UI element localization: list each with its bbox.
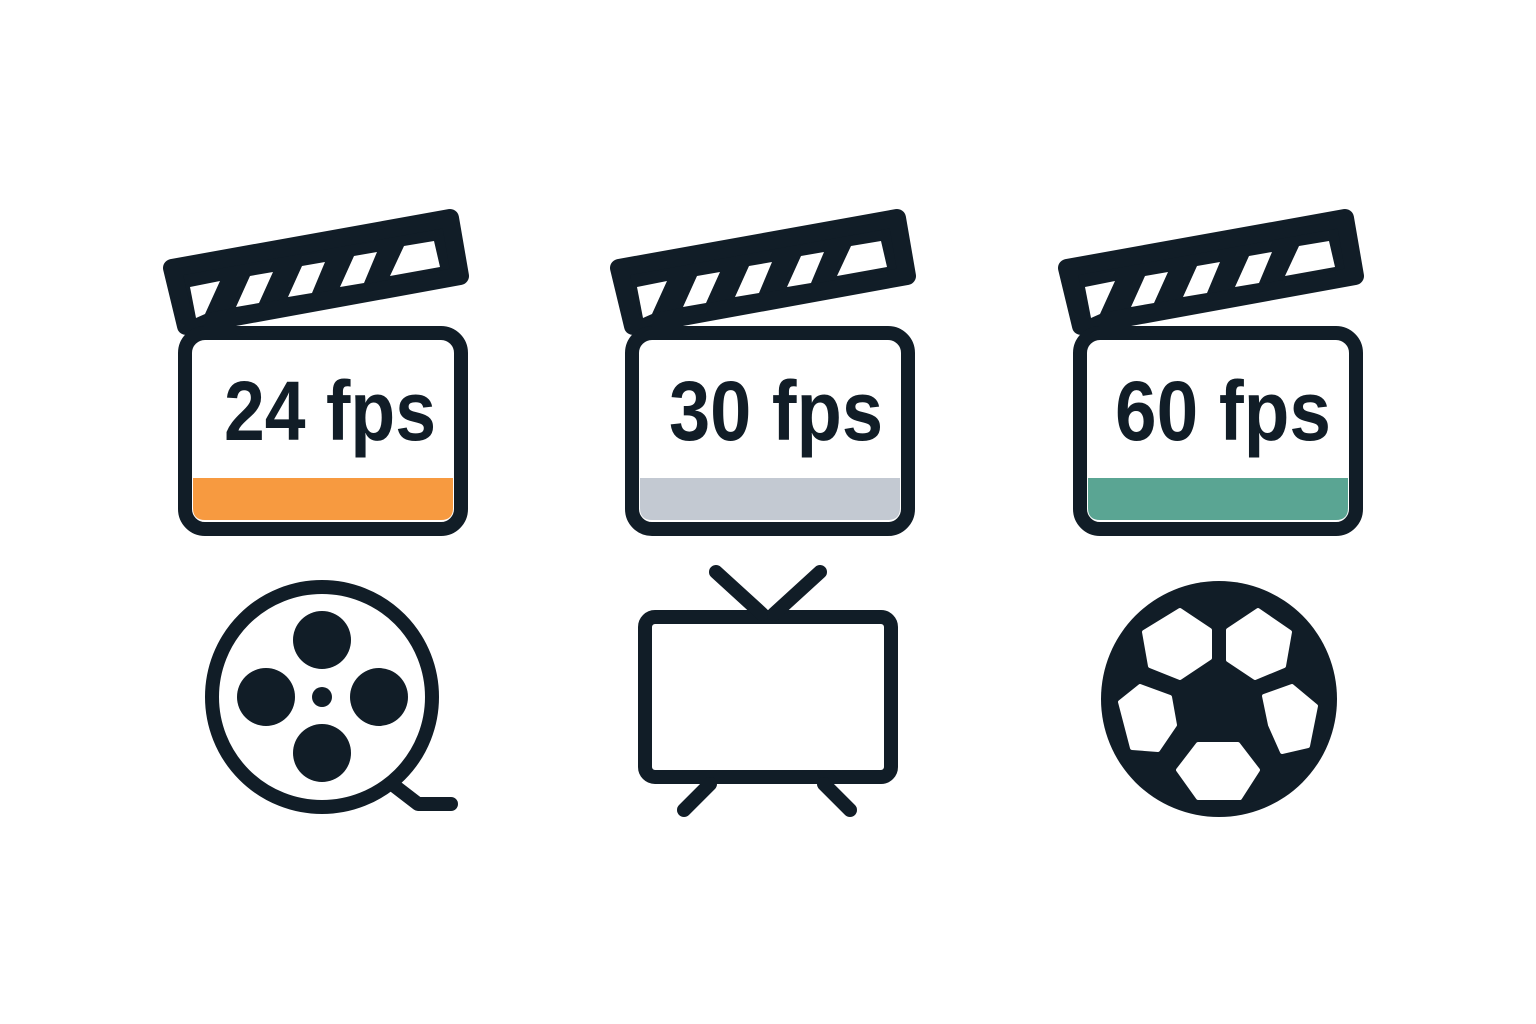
icon: television <box>645 572 891 810</box>
clapper: 24 fps <box>172 218 461 529</box>
icon: soccer ball <box>1101 581 1337 817</box>
label: 60 fps: 60 fps <box>1115 364 1331 458</box>
icon: film reel <box>212 587 451 807</box>
clapper: 60 fps <box>1067 218 1356 529</box>
label: 24 fps: 24 fps <box>224 364 436 458</box>
label: 30 fps: 30 fps <box>669 364 883 458</box>
clapper: 30 fps <box>619 218 908 529</box>
